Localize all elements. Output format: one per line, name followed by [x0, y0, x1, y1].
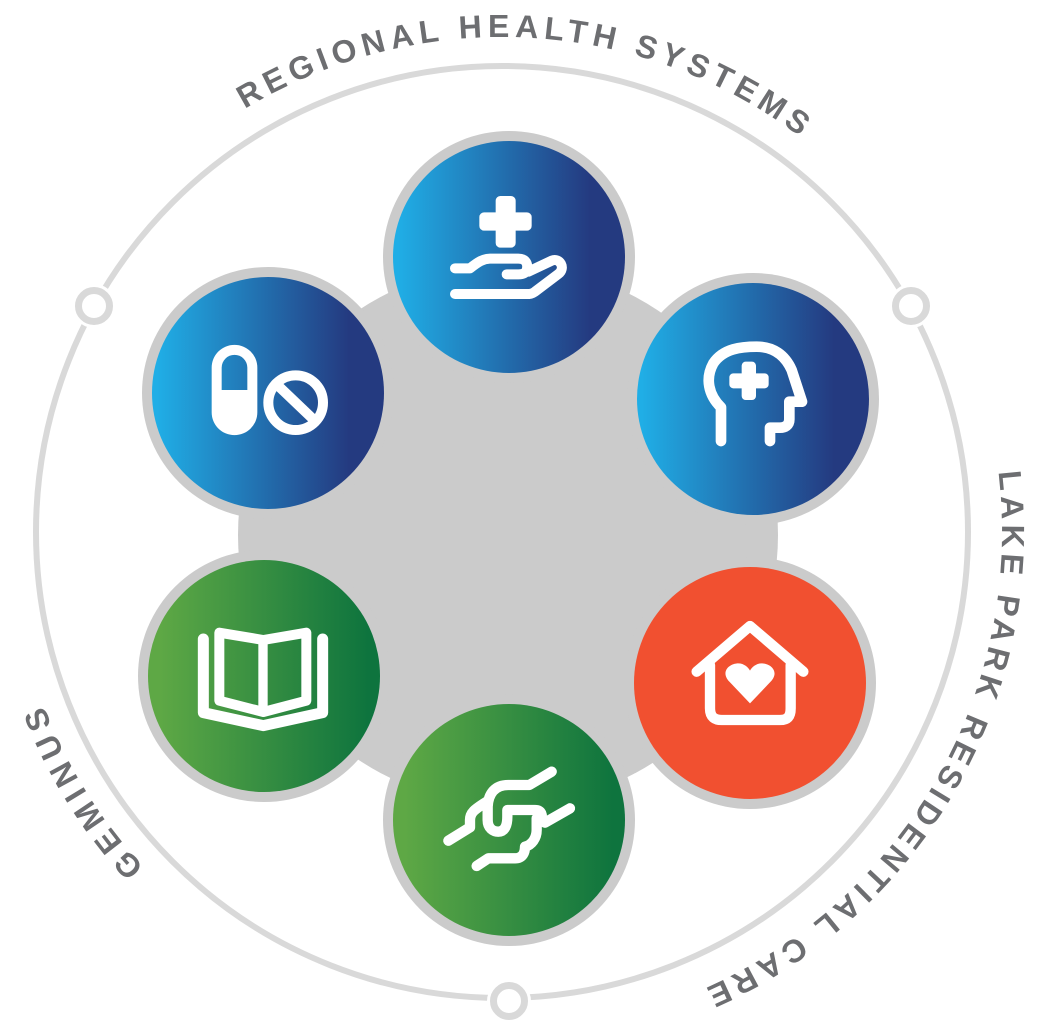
icon: hand with cross [455, 196, 562, 294]
ring node bottom [487, 979, 531, 1023]
panel: lower left green disc with book icon [138, 550, 390, 802]
label: regional health systems: REGIONAL HEALTH SYSTEMS [236, 15, 809, 134]
label: geminus: GEMINUS [26, 708, 140, 877]
icon: capsule and prohibition sign [212, 345, 323, 435]
central grey hub [238, 265, 778, 805]
panel: lower right orange disc with house icon [624, 557, 876, 809]
label: lake park residential care: LAKE PARK RESIDENTIAL CARE [706, 472, 1024, 1008]
ring node left [72, 284, 116, 328]
panel: upper left blue disc with pill icon [142, 267, 394, 519]
icon: handshake [448, 772, 570, 866]
panel: bottom green disc with handshake icon [383, 694, 635, 946]
icon: house with heart [697, 626, 803, 720]
icon: head with cross [709, 347, 802, 441]
ring node right [889, 284, 933, 328]
panel: top blue disc with hand and cross icon [383, 131, 635, 383]
panel: upper right blue disc with head icon [627, 273, 879, 525]
icon: open book [203, 633, 323, 726]
